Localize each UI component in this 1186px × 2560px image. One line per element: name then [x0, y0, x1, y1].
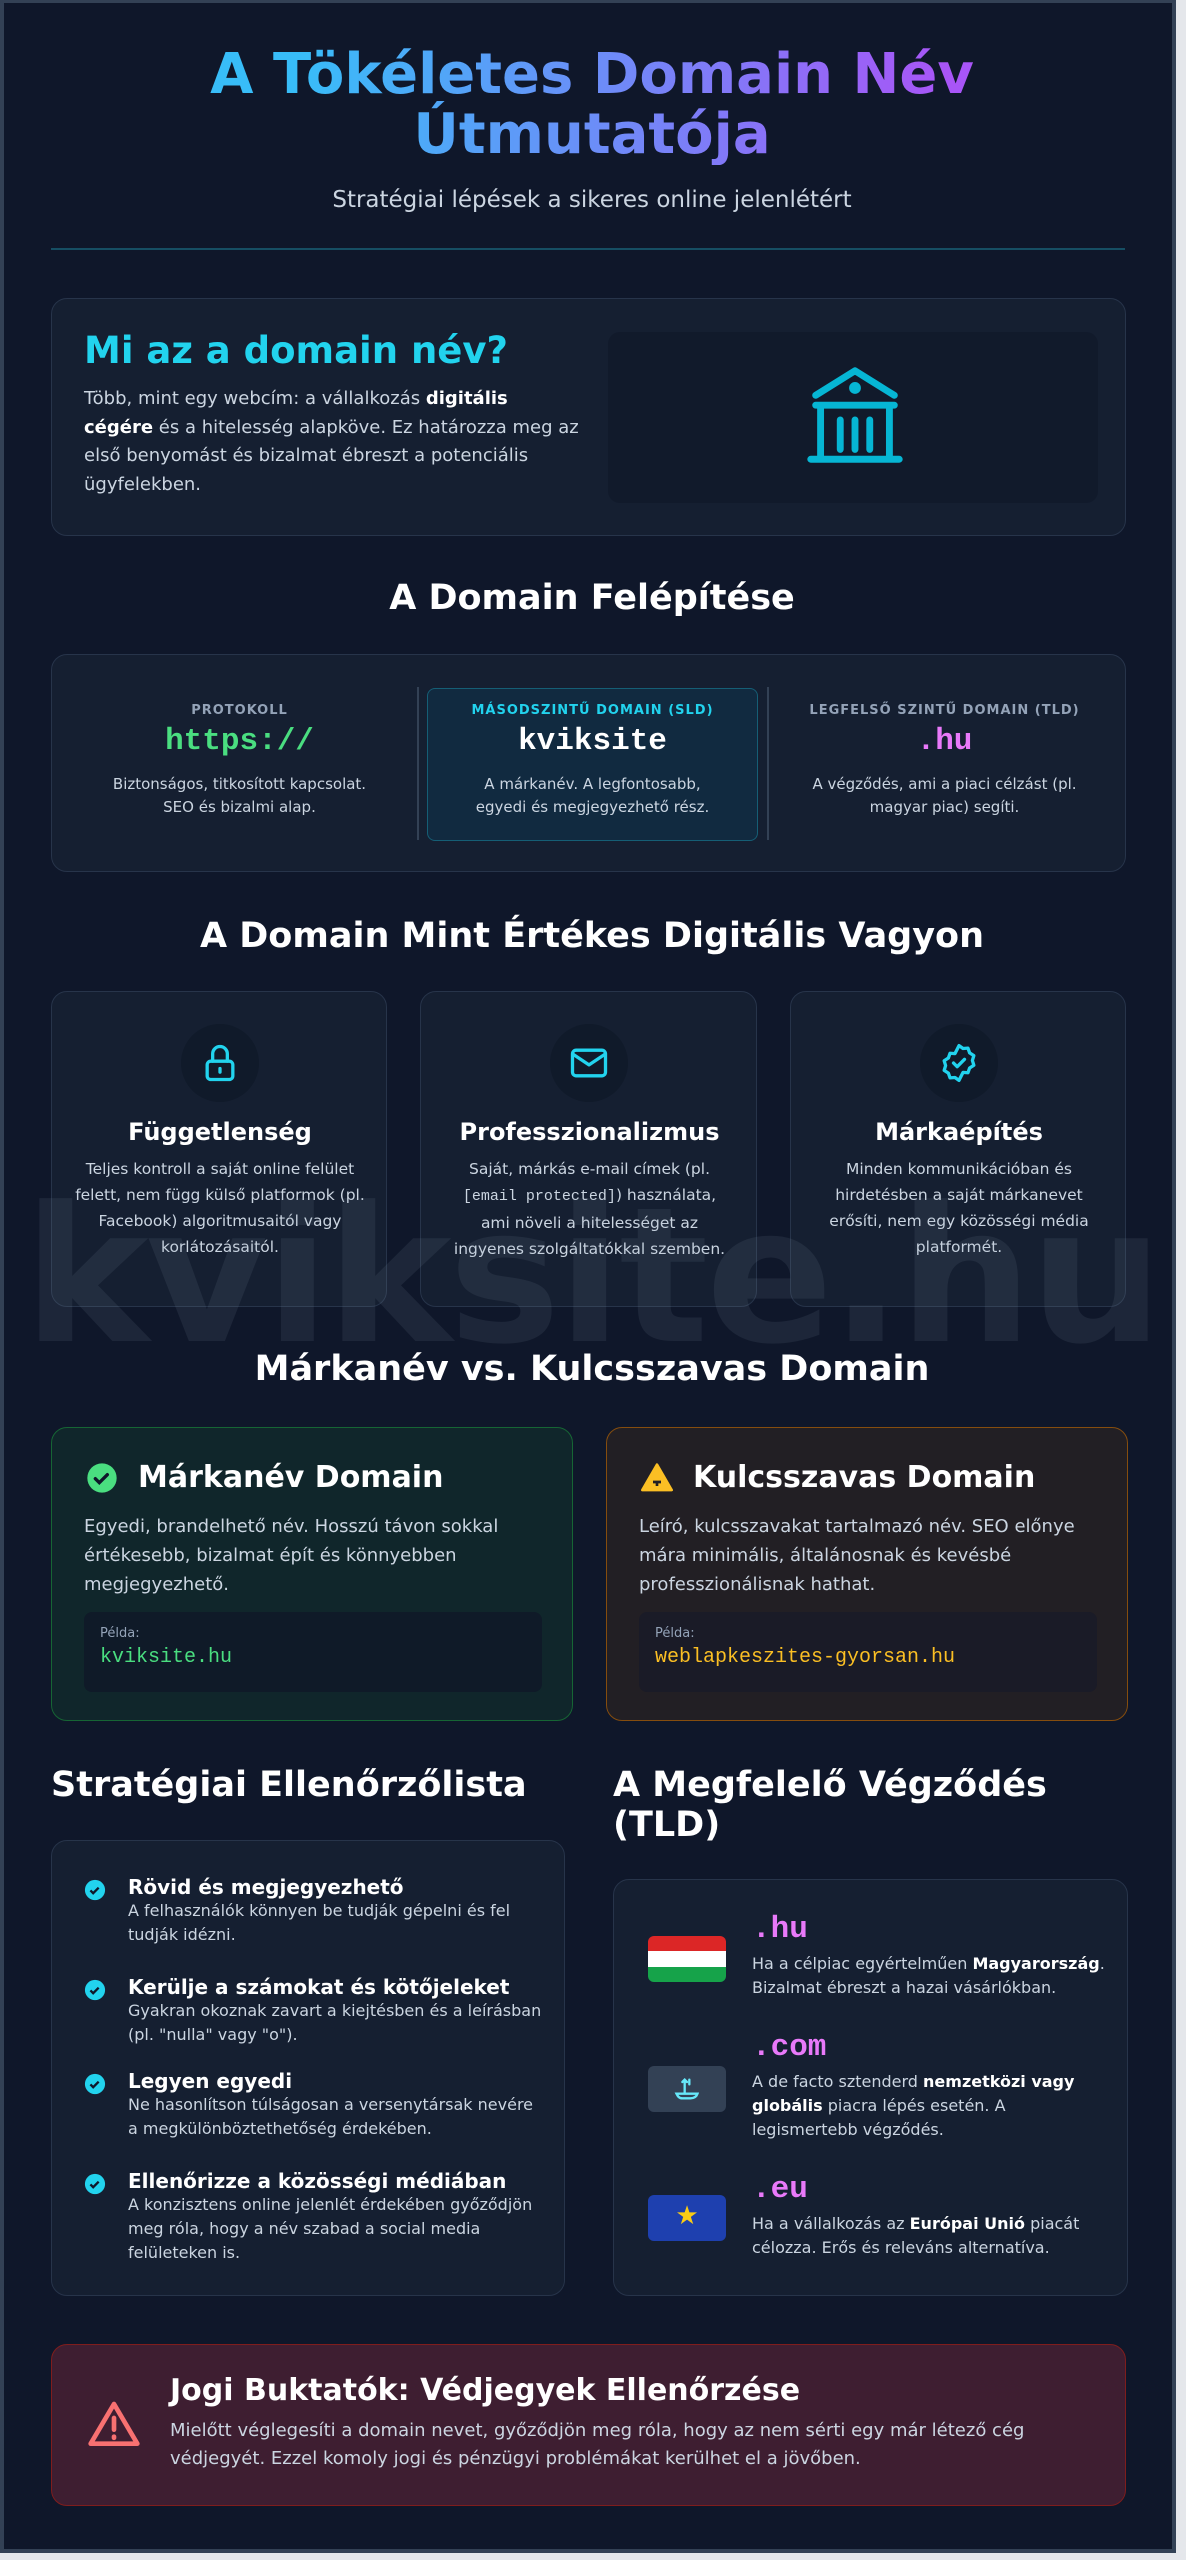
title: Útmutatója — [413, 102, 771, 167]
item 1 — [84, 1875, 510, 1944]
panel: brand domain — [51, 1427, 573, 1721]
panel: keyword domain: Leíró, kulcsszavakat tartalmazó név. SEO előnye mára minimális, általánosnak és kevésbé professzionálisnak hathat. — [639, 1516, 1075, 1595]
column: TLD — [809, 702, 1080, 816]
title: A Tökéletes Domain Név — [210, 42, 974, 107]
item 4: A konzisztens online jelenlét érdekében győződjön meg róla, hogy a név szabad a social media felületeken is. — [128, 2195, 532, 2262]
heading: checklist: Stratégiai Ellenőrzőlista — [51, 1765, 527, 1805]
panel: independence: Teljes kontroll a saját online felület felett, nem függ külső platformok (pl. Facebook) algoritmusaitól vagy korlátozásaitól. — [75, 1160, 365, 1256]
item 4 — [84, 2169, 532, 2262]
panel: keyword domain: Kulcsszavas Domain — [693, 1460, 1035, 1495]
item 3 — [84, 2069, 533, 2138]
panel: legal warning: Jogi Buktatók: Védjegyek Ellenőrzése — [170, 2373, 800, 2408]
column: SLD highlighted: A márkanév. A legfontosabb, — [484, 775, 701, 793]
icon: hungarian flag — [648, 1936, 726, 1982]
panel: branding — [790, 991, 1126, 1307]
panel: keyword domain — [606, 1427, 1128, 1721]
item 4: Ellenőrizze a közösségi médiában — [128, 2169, 506, 2193]
column: protocol — [113, 703, 366, 816]
column: SLD highlighted: MÁSODSZINTŰ DOMAIN (SLD) — [471, 703, 714, 718]
column: protocol: PROTOKOLL — [191, 703, 288, 718]
example box — [639, 1612, 1097, 1692]
heading: TLD: (TLD) — [613, 1805, 720, 1845]
panel: legal warning — [51, 2344, 1126, 2506]
text block: Több, mint egy webcím: a vállalkozás digitális cégére és a hitelesség alapköve. Ez határozza meg az első benyomást és bizalmat ébreszt a potenciális ügyfelekben. — [84, 388, 579, 494]
icon: ship — [648, 2066, 726, 2112]
row: eu: Ha a vállalkozás az Európai Unió piacát célozza. Erős és releváns alternatíva. — [752, 2214, 1079, 2257]
panel: brand domain: Márkanév Domain — [138, 1460, 443, 1495]
panel: branding: Márkaépítés — [875, 1118, 1043, 1146]
title — [4, 45, 1180, 165]
row: com: A de facto sztenderd nemzetközi vagy globális piacra lépés esetén. A legismertebb végződés. — [752, 2072, 1074, 2139]
item 1: Rövid és megjegyezhető — [128, 1875, 404, 1899]
column: TLD: LEGFELSŐ SZINTŰ DOMAIN (TLD) — [809, 703, 1080, 718]
column: SLD highlighted: kviksite — [518, 724, 667, 759]
heading: TLD: A Megfelelő Végződés — [613, 1765, 1047, 1805]
panel: professionalism — [420, 991, 757, 1307]
panel: brand domain: Egyedi, brandelhető név. Hosszú távon sokkal értékesebb, bizalmat épít és könnyebben megjegyezhető. — [84, 1516, 498, 1595]
row: eu: .eu — [752, 2172, 808, 2207]
example box: Példa: — [655, 1626, 695, 1641]
item 1: A felhasználók könnyen be tudják gépelni és fel tudják idézni. — [128, 1901, 510, 1944]
row: com: .com — [752, 2030, 826, 2065]
heading: asset: A Domain Mint Értékes Digitális Vagyon — [200, 916, 984, 956]
icon: mail — [550, 1024, 628, 1102]
example box: weblapkeszites-gyorsan.hu — [655, 1646, 955, 1669]
column: protocol: SEO és bizalmi alap. — [163, 798, 316, 816]
row: hu: .hu — [752, 1912, 808, 1947]
panel: legal warning: Mielőtt véglegesíti a domain nevet, győződjön meg róla, hogy az nem sérti egy már létező cég védjegyét. Ezzel komoly jogi és pénzügyi problémákat kerülhet el a jövőben. — [170, 2420, 1024, 2469]
icon: badge — [920, 1024, 998, 1102]
row: eu — [648, 2172, 1079, 2257]
panel: structure — [51, 654, 1126, 872]
heading: brand vs keyword: Márkanév vs. Kulcsszavas Domain — [255, 1349, 929, 1389]
heading: structure: A Domain Felépítése — [389, 578, 795, 618]
column: protocol: https:// — [165, 724, 314, 759]
item 2 — [84, 1975, 541, 2044]
column: SLD highlighted — [427, 688, 758, 841]
item 3: Ne hasonlítson túlságosan a versenytársak nevére a megkülönböztethetőség érdekében. — [128, 2095, 533, 2138]
example box: kviksite.hu — [100, 1646, 232, 1669]
row: hu: Ha a célpiac egyértelműen Magyarország. Bizalmat ébreszt a hazai vásárlókban. — [752, 1954, 1105, 1997]
icon: bank — [608, 332, 1098, 503]
example box: Példa: — [100, 1626, 140, 1641]
panel: independence: Függetlenség — [128, 1118, 312, 1146]
item 3: Legyen egyedi — [128, 2069, 292, 2093]
panel: professionalism: Saját, márkás e-mail címek (pl. [email protected]) használata, ami növeli a hitelességet az ingyenes szolgáltatókkal szemben. — [454, 1160, 725, 1258]
panel: professionalism: Professzionalizmus — [460, 1118, 719, 1146]
panel: what is domain — [51, 298, 1126, 536]
panel: branding: Minden kommunikációban és hirdetésben a saját márkanevet erősíti, nem egy közösségi média platformét. — [829, 1160, 1089, 1256]
panel: TLD — [613, 1879, 1128, 2296]
heading: TLD — [613, 1765, 1047, 1845]
column: TLD: magyar piac) segíti. — [870, 798, 1019, 816]
icon: lock — [181, 1024, 259, 1102]
column: protocol: Biztonságos, titkosított kapcsolat. — [113, 775, 366, 793]
row: hu — [648, 1912, 1105, 1997]
icon: warning — [641, 1463, 673, 1492]
example box — [84, 1612, 542, 1692]
panel: independence — [51, 991, 387, 1307]
panel: checklist — [51, 1840, 565, 2296]
item 2: Kerülje a számokat és kötőjeleket — [128, 1975, 509, 1999]
icon: alert triangle — [88, 2402, 140, 2446]
column: TLD: A végződés, ami a piaci célzást (pl. — [812, 775, 1077, 793]
item 2: Gyakran okoznak zavart a kiejtésben és a leírásban (pl. "nulla" vagy "o"). — [128, 2001, 541, 2044]
column: SLD highlighted: egyedi és megjegyezhető rész. — [476, 798, 709, 816]
icon: eu flag — [648, 2195, 726, 2241]
subtitle: Stratégiai lépések a sikeres online jelenlétért — [332, 187, 852, 213]
column: TLD: .hu — [917, 724, 972, 759]
icon: eu flag: ★ — [675, 2201, 699, 2231]
watermark: kviksite.hu — [24, 1167, 1160, 1386]
row: com — [648, 2030, 1074, 2139]
heading: Mi az a domain név? — [84, 329, 508, 372]
icon: check circle — [87, 1463, 117, 1493]
